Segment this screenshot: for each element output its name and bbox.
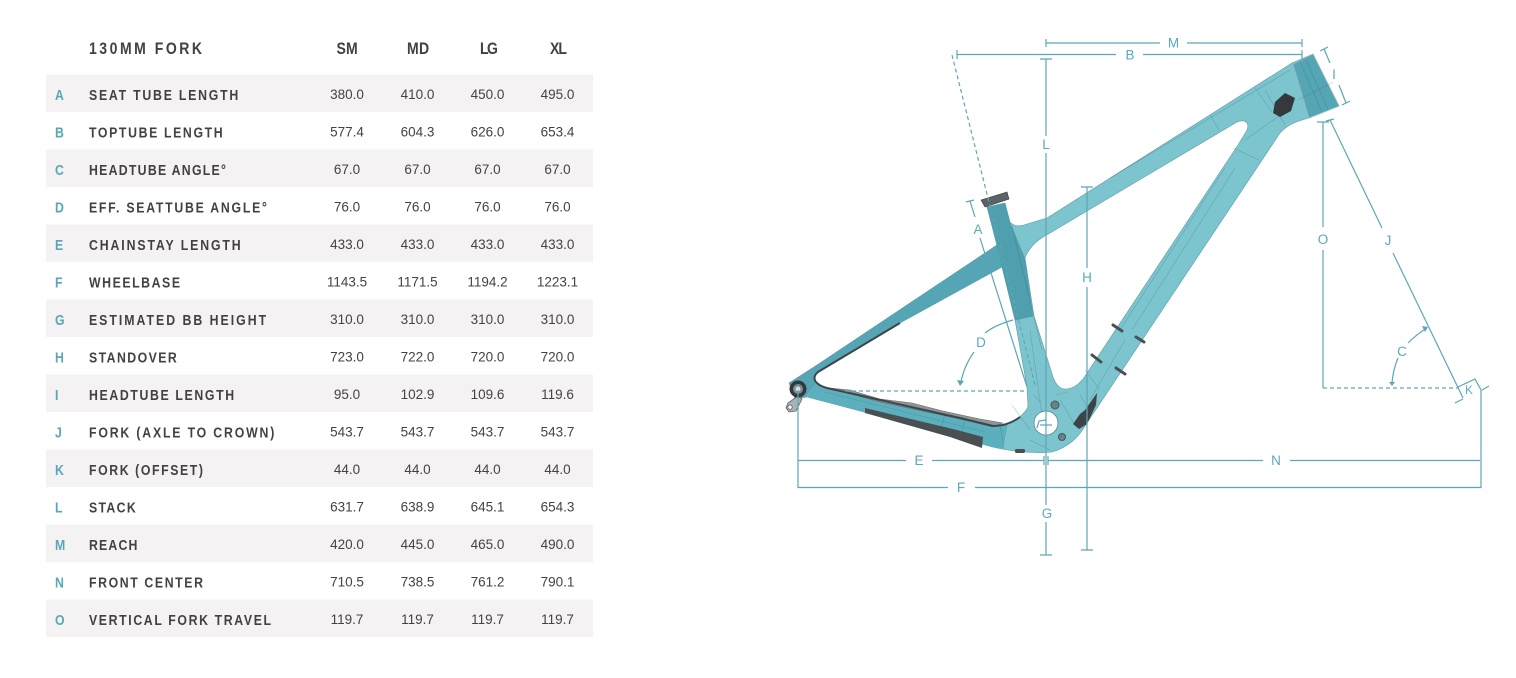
row F: wheelbase: F <box>55 274 63 291</box>
row B: toptube length: 653.4 <box>541 124 575 140</box>
row F: wheelbase: 1194.2 <box>467 274 508 290</box>
row M: reach: REACH <box>89 537 137 553</box>
row A: seat tube length: 410.0 <box>401 87 434 102</box>
row O: vertical fork travel: 119.7 <box>331 612 363 627</box>
row H: standover: 720.0 <box>471 350 504 364</box>
row O: vertical fork travel: 119.7 <box>541 612 574 627</box>
row G: estimated BB height: G <box>55 312 65 328</box>
dimension E: chainstay length: E <box>914 453 924 468</box>
dimension N: front center: N <box>1271 453 1281 468</box>
row O: vertical fork travel: 119.7 <box>401 612 434 627</box>
row J: fork axle to crown: 543.7 <box>401 424 434 440</box>
row H: standover: 723.0 <box>330 350 364 364</box>
frame wire lines <box>825 60 1333 450</box>
row D: effective seattube angle: 76.0 <box>334 200 360 214</box>
row D: effective seattube angle: EFF. SEATTUBE ANGLE° <box>89 199 267 216</box>
row J: fork axle to crown: J <box>55 424 62 441</box>
row O: vertical fork travel <box>46 600 593 637</box>
row D: effective seattube angle: D <box>55 199 64 216</box>
table header row: LG <box>480 40 498 58</box>
row N: front center: 710.5 <box>330 574 364 590</box>
row I: headtube length: 109.6 <box>471 387 504 402</box>
collar <box>981 192 1009 207</box>
row I: headtube length: I <box>55 387 58 403</box>
effective seat angle dashed line <box>952 55 1035 385</box>
row B: toptube length: 604.3 <box>401 124 434 140</box>
dimension K: fork offset <box>1458 379 1489 397</box>
dimension J: fork length <box>1326 119 1463 403</box>
dimension D: seat angle arc <box>957 320 1013 386</box>
rear axle dropout <box>790 380 806 398</box>
table header row <box>89 40 567 58</box>
chain stay <box>807 384 1008 449</box>
dimension A: seat tube length <box>966 200 1027 387</box>
row L: stack: L <box>55 499 63 516</box>
row A: seat tube length: 450.0 <box>471 87 504 102</box>
dimension J: fork length: J <box>1385 233 1391 248</box>
row K: fork offset: 44.0 <box>334 462 360 477</box>
row G: estimated BB height <box>46 300 593 337</box>
row F: wheelbase: WHEELBASE <box>89 274 180 291</box>
front horizontal dashed reference <box>1323 387 1458 389</box>
row L: stack: 631.7 <box>330 500 364 514</box>
top cable guard <box>830 388 1003 427</box>
row N: front center: 761.2 <box>471 574 504 590</box>
row H: standover: 720.0 <box>541 350 574 364</box>
row J: fork axle to crown: FORK (AXLE TO CROWN) <box>89 424 274 441</box>
dimension F: wheelbase: F <box>957 480 965 495</box>
head tube cable port <box>1273 93 1295 117</box>
dimension A: seat tube length: A <box>973 222 983 237</box>
row J: fork axle to crown: 543.7 <box>471 424 504 440</box>
row C: headtube angle: 67.0 <box>474 162 501 177</box>
inner edge guards <box>815 323 1020 426</box>
row O: vertical fork travel: O <box>55 612 65 628</box>
row C: headtube angle: HEADTUBE ANGLE° <box>89 162 226 178</box>
row G: estimated BB height: 310.0 <box>330 312 364 327</box>
row N: front center: 738.5 <box>401 574 434 590</box>
row F: wheelbase: 1223.1 <box>537 274 578 290</box>
row M: reach: 420.0 <box>330 537 364 552</box>
row J: fork axle to crown: 543.7 <box>330 424 364 440</box>
row A: seat tube length: A <box>55 87 64 103</box>
bottle cage bolts <box>1092 325 1144 374</box>
row N: front center: N <box>55 574 64 591</box>
dimension O: vertical fork travel: O <box>1318 232 1328 247</box>
dimension B: toptube length: B <box>1125 48 1135 62</box>
dimension M: reach: M <box>1168 36 1179 50</box>
row H: standover: H <box>55 349 64 366</box>
dimension I: headtube length <box>1320 47 1350 105</box>
table: geometry by size <box>46 40 593 637</box>
dimension H: standover: H <box>1082 270 1092 285</box>
frame body <box>789 54 1339 453</box>
dimension E: chainstay length <box>798 453 1044 468</box>
row O: vertical fork travel: VERTICAL FORK TRAVEL <box>89 612 271 628</box>
dimension M: reach <box>1046 36 1302 50</box>
row B: toptube length: TOPTUBE LENGTH <box>89 124 223 141</box>
row K: fork offset: K <box>55 462 64 478</box>
row I: headtube length: 95.0 <box>334 387 360 402</box>
row B: toptube length: 577.4 <box>330 124 364 140</box>
row N: front center <box>55 574 574 591</box>
dimension G: BB height: G <box>1042 506 1052 521</box>
row E: chainstay length: 433.0 <box>541 237 574 252</box>
row M: reach: 490.0 <box>541 537 574 552</box>
table header row: SM <box>336 40 358 58</box>
row M: reach: 465.0 <box>471 537 504 552</box>
row L: stack: 645.1 <box>471 500 504 514</box>
row L: stack: STACK <box>89 499 136 516</box>
row G: estimated BB height: 310.0 <box>471 312 504 327</box>
dimension F: wheelbase <box>798 390 1481 495</box>
row K: fork offset: 44.0 <box>404 462 431 477</box>
row J: fork axle to crown <box>55 424 574 441</box>
row D: effective seattube angle: 76.0 <box>544 200 571 214</box>
row F: wheelbase: 1143.5 <box>327 274 367 290</box>
row N: front center: FRONT CENTER <box>89 574 203 591</box>
row N: front center: 790.1 <box>541 574 574 590</box>
row L: stack: 638.9 <box>401 500 434 514</box>
row D: effective seattube angle: 76.0 <box>404 200 431 214</box>
dimension C: head angle arc: C <box>1397 344 1407 359</box>
bottom bracket lower bump <box>1015 449 1025 453</box>
seat stay <box>789 245 1002 399</box>
row I: headtube length: HEADTUBE LENGTH <box>89 387 234 403</box>
row C: headtube angle: 67.0 <box>334 162 360 177</box>
row B: toptube length: B <box>55 124 64 141</box>
table header row: XL <box>550 40 567 58</box>
dimension I: headtube length: I <box>1332 67 1336 82</box>
row K: fork offset: FORK (OFFSET) <box>89 462 203 478</box>
dimension K: fork offset: K <box>1465 385 1473 397</box>
row A: seat tube length <box>46 74 593 112</box>
row E: chainstay length: 433.0 <box>330 237 364 252</box>
seat tube dark upper section <box>987 203 1033 320</box>
cable clutter near BB <box>1073 393 1097 429</box>
row M: reach <box>46 524 593 562</box>
bottom bracket hole <box>1034 411 1058 435</box>
chainstay protector <box>865 408 983 448</box>
row K: fork offset: 44.0 <box>544 462 571 477</box>
row F: wheelbase <box>55 274 578 291</box>
row E: chainstay length: CHAINSTAY LENGTH <box>89 237 241 253</box>
row J: fork axle to crown: 543.7 <box>541 424 574 440</box>
row E: chainstay length: 433.0 <box>471 237 504 252</box>
row A: seat tube length: SEAT TUBE LENGTH <box>89 87 238 103</box>
dimension G: BB height <box>1040 425 1052 555</box>
dimension L: stack: L <box>1042 137 1050 152</box>
row H: standover <box>55 349 574 366</box>
row L: stack <box>55 499 574 516</box>
dropout hanger <box>786 396 802 412</box>
head tube <box>1293 54 1339 118</box>
row A: seat tube length: 495.0 <box>541 87 574 102</box>
row M: reach: 445.0 <box>401 537 434 552</box>
row B: toptube length <box>55 124 575 141</box>
row F: wheelbase: 1171.5 <box>397 274 438 290</box>
dimension N: front center <box>1048 453 1480 468</box>
row M: reach: M <box>55 537 65 553</box>
dimension D: seat angle arc: D <box>976 335 986 350</box>
row K: fork offset <box>46 450 593 487</box>
table header row: 130MM FORK <box>89 40 202 58</box>
row E: chainstay length: 433.0 <box>401 237 434 252</box>
dimension H: standover <box>1081 187 1093 550</box>
row E: chainstay length <box>46 224 593 262</box>
dimension O: vertical fork travel <box>1317 122 1329 388</box>
row C: headtube angle: 67.0 <box>404 162 431 177</box>
row C: headtube angle: 67.0 <box>544 162 571 177</box>
row I: headtube length: 119.6 <box>541 387 574 402</box>
table header row: MD <box>407 40 429 58</box>
row C: headtube angle <box>46 150 593 187</box>
row G: estimated BB height: ESTIMATED BB HEIGHT <box>89 312 267 328</box>
row D: effective seattube angle: 76.0 <box>474 200 501 214</box>
row A: seat tube length: 380.0 <box>330 87 364 102</box>
row I: headtube length: 102.9 <box>401 387 434 402</box>
bike frame illustration <box>786 54 1339 453</box>
rear horizontal dashed reference <box>845 390 1027 392</box>
bottom bracket bolts <box>1051 401 1066 440</box>
row K: fork offset: 44.0 <box>474 462 501 477</box>
dimension C: head angle arc <box>1389 326 1428 386</box>
row L: stack: 654.3 <box>541 500 574 514</box>
row I: headtube length <box>46 374 593 412</box>
row B: toptube length: 626.0 <box>471 124 504 140</box>
row H: standover: 722.0 <box>401 350 434 364</box>
row G: estimated BB height: 310.0 <box>401 312 434 327</box>
row G: estimated BB height: 310.0 <box>541 312 574 327</box>
row O: vertical fork travel: 119.7 <box>471 612 504 627</box>
row D: effective seattube angle <box>55 199 571 216</box>
row E: chainstay length: E <box>55 237 63 253</box>
row C: headtube angle: C <box>55 162 64 178</box>
row H: standover: STANDOVER <box>89 349 177 366</box>
dimension L: stack <box>1037 59 1052 428</box>
dimension B: toptube length <box>957 48 1302 62</box>
